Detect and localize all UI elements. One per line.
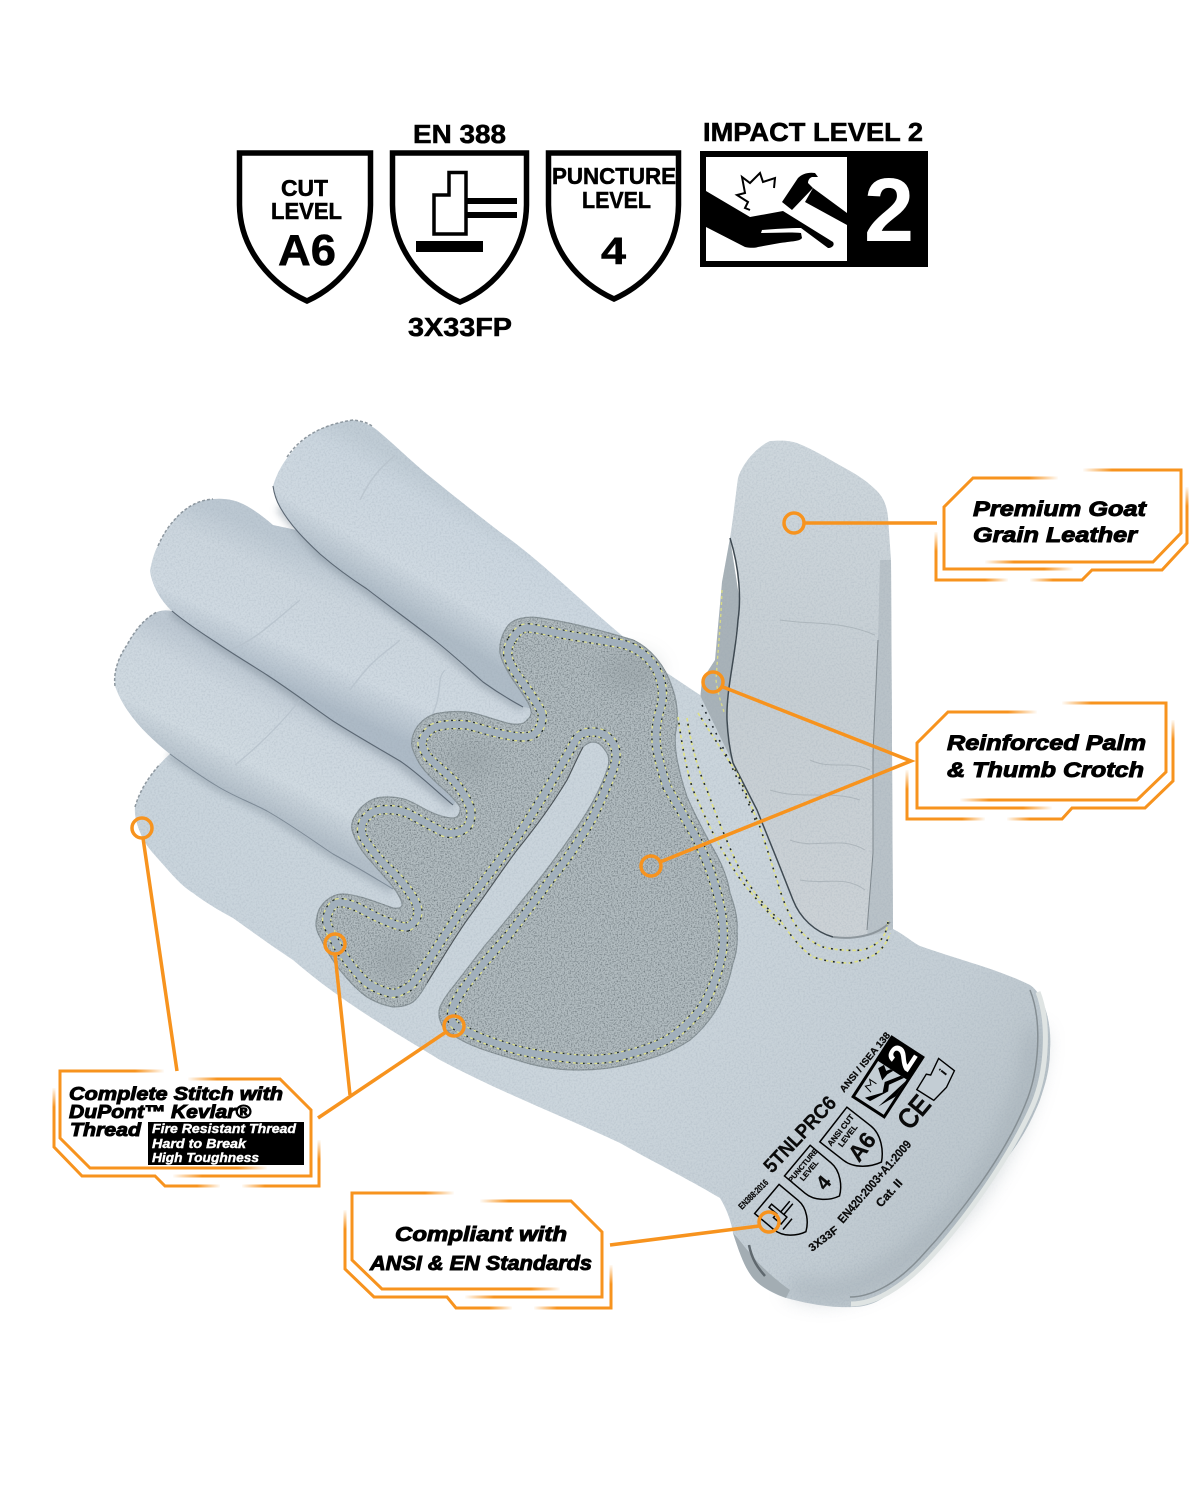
finger tip seams <box>115 420 372 807</box>
icon: puncture level 4 shield <box>548 153 678 299</box>
label: ANSI ISEA 138: ANSI / ISEA 138 <box>838 1030 893 1095</box>
label: EN 388 mini shield <box>755 1184 818 1246</box>
label: book info icon <box>915 1058 958 1103</box>
label: EN code: 3X33F <box>807 1224 841 1254</box>
middle finger shadow from index <box>280 507 523 707</box>
glove leather shapes <box>115 420 1050 1307</box>
label: puncture mini shield <box>784 1145 853 1212</box>
callout frame <box>342 1190 614 1310</box>
icon: puncture level 4 shield: PUNCTURE <box>552 163 676 189</box>
callout: compliant with ANSI and EN standards <box>342 1190 614 1310</box>
label: puncture mini shield: 4 <box>812 1171 837 1194</box>
label: CE mark: CE <box>892 1090 936 1135</box>
label: A6 mini shield: A6 <box>842 1127 881 1166</box>
text: EN 388 code: 3X33FP <box>408 312 512 342</box>
benefit list: Fire Resistant Thread <box>152 1122 296 1136</box>
label: A6 mini shield: LEVEL <box>836 1123 859 1149</box>
cuff fold tab <box>733 1233 790 1298</box>
palm, pinky and cuff base <box>135 532 1050 1307</box>
cuff rim <box>851 992 1045 1304</box>
label: EN 388 year: EN388:2016 <box>736 1177 770 1211</box>
label: puncture mini shield: PUNCTURE <box>786 1147 820 1184</box>
thumb <box>727 441 893 950</box>
benefit list: High Toughness <box>152 1151 259 1165</box>
callout: premium goat grain leather: Grain Leather <box>973 524 1139 547</box>
finger wrinkles <box>230 455 445 765</box>
callout: reinforced palm and thumb crotch <box>904 700 1176 822</box>
thumb crotch reinforcement band stitches <box>678 705 890 963</box>
benefit list: Hard to Break <box>152 1137 247 1151</box>
icon: cut level A6 shield: A6 <box>278 226 336 275</box>
callout text: Reinforced Palm <box>947 732 1146 755</box>
callout frame <box>52 1068 322 1188</box>
label: A6 mini shield: ANSI CUT <box>826 1113 856 1148</box>
label: mini impact box: 2 <box>879 1038 926 1078</box>
icon: cut level A6 shield <box>240 153 370 301</box>
icon: EN 388 shield with hammer <box>392 153 526 302</box>
cuff stitch line <box>850 990 1038 1297</box>
leader: premium goat grain leather <box>784 513 937 533</box>
suede behind thumb <box>700 538 740 768</box>
thumb side seam <box>833 922 890 938</box>
label: mini impact box <box>851 1035 927 1121</box>
callout: premium goat grain leather <box>934 468 1190 582</box>
callout: compliant with ANSI and EN standards: ANSI & EN Standards <box>369 1253 592 1275</box>
thumb creases <box>770 620 875 890</box>
callout: complete stitch with DuPont Kevlar thread: DuPont™ Kevlar® <box>69 1102 252 1122</box>
finger: index <box>273 420 667 720</box>
icon: puncture level 4 shield: LEVEL <box>582 187 651 213</box>
callout: reinforced palm and thumb crotch: & Thumb Crotch <box>947 759 1144 782</box>
glove printed labels <box>736 1030 958 1254</box>
certification icons row <box>240 117 928 342</box>
icon: impact level 2 hand and hammer box <box>700 151 928 267</box>
leader: reinforced palm and thumb crotch <box>641 672 911 876</box>
icon: puncture level 4 shield: 4 <box>601 231 626 273</box>
finger: middle <box>150 499 527 805</box>
thumb fold line <box>867 640 878 930</box>
callout text: Premium Goat <box>973 498 1147 521</box>
heading: impact level 2: IMPACT LEVEL 2 <box>703 117 923 147</box>
leader: kevlar stitching points <box>132 818 464 1118</box>
callout frame <box>934 468 1190 582</box>
label: category: Cat. II <box>873 1176 905 1210</box>
heading: EN 388: EN 388 <box>413 119 506 149</box>
label: book info icon: i <box>937 1066 950 1078</box>
label: A6 mini shield <box>820 1107 895 1179</box>
icon: cut level A6 shield: CUT <box>281 175 328 201</box>
cuff fold shadow <box>749 1245 765 1276</box>
callout frame <box>904 700 1176 822</box>
label: model number: 5TNLPRC6 <box>760 1092 841 1177</box>
glove photo illustration <box>115 420 1050 1307</box>
thumb crotch seam line <box>727 538 833 937</box>
finger edge lines <box>170 486 523 889</box>
callout: complete stitch with DuPont Kevlar thread: Thread <box>70 1120 142 1140</box>
suede thumb stitches <box>716 590 724 712</box>
finger: ring <box>115 610 453 889</box>
callout: complete stitch with DuPont Kevlar thread <box>52 1068 322 1188</box>
ring finger shadow from middle <box>172 611 453 805</box>
label: puncture mini shield: LEVEL <box>798 1158 821 1183</box>
stitched band around patch <box>327 628 723 1059</box>
leader: compliant standards <box>610 1212 779 1245</box>
benefit list <box>152 1122 296 1165</box>
cuff shading <box>790 1030 1035 1292</box>
callout text: Complete Stitch with <box>69 1084 283 1104</box>
black benefit box <box>148 1122 304 1165</box>
thumb side fold <box>867 560 893 937</box>
suede mottling <box>373 652 660 978</box>
icon: impact level 2 hand and hammer box: 2 <box>864 161 914 261</box>
suede reinforced palm patch with slit <box>316 617 737 1070</box>
label: EN 420: EN420:2003+A1:2009 <box>835 1137 914 1226</box>
icon: cut level A6 shield: LEVEL <box>271 198 342 224</box>
pinky shadow from ring finger <box>170 754 393 889</box>
slit shadow edge <box>427 747 583 983</box>
callout text: Compliant with <box>395 1224 567 1246</box>
